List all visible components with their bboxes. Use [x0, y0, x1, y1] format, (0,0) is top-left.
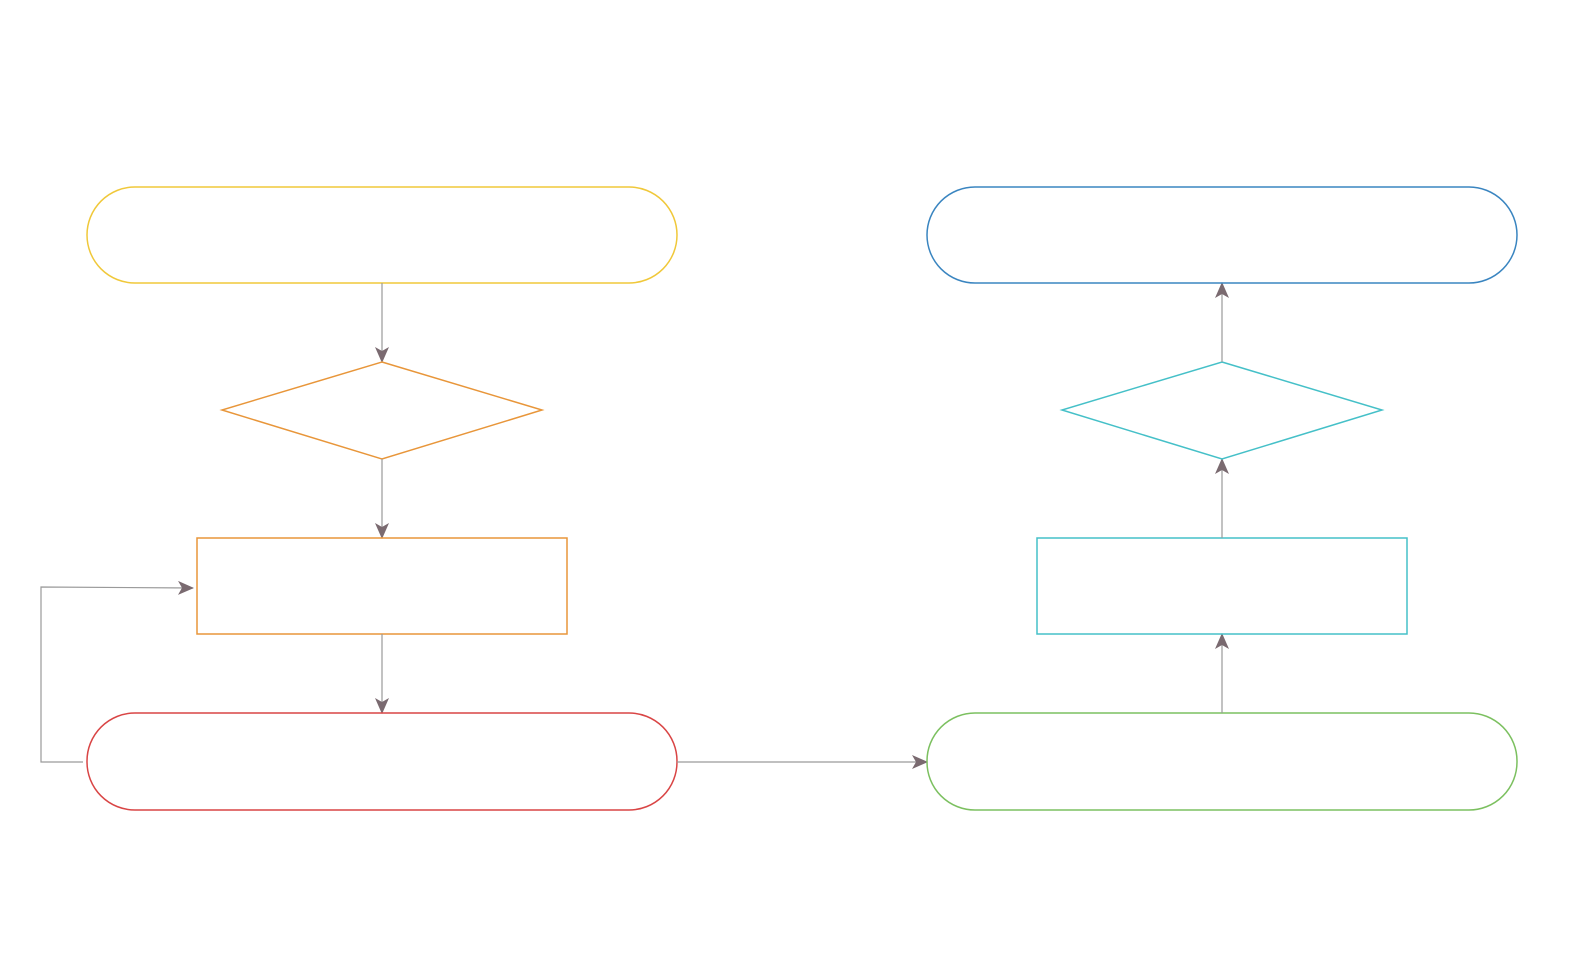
- pill: red: [87, 713, 677, 810]
- arrow: decision to process: [381, 459, 383, 538]
- process box: orange: [197, 538, 567, 634]
- pill: green: [927, 713, 1517, 810]
- arrow: cyan box to cyan diamond: [1221, 459, 1223, 538]
- arrow: process to red pill: [381, 634, 383, 713]
- arrow: start to decision: [381, 283, 383, 362]
- arrow: red pill to green pill: [677, 761, 927, 763]
- feedback loop arrow: [41, 587, 193, 762]
- end pill: blue: [927, 187, 1517, 283]
- process box: cyan: [1037, 538, 1407, 634]
- arrow: cyan diamond to blue pill: [1221, 283, 1223, 362]
- start pill: yellow: [87, 187, 677, 283]
- decision diamond: cyan: [1062, 362, 1382, 459]
- decision diamond: orange: [222, 362, 542, 459]
- arrow: green pill to cyan box: [1221, 634, 1223, 713]
